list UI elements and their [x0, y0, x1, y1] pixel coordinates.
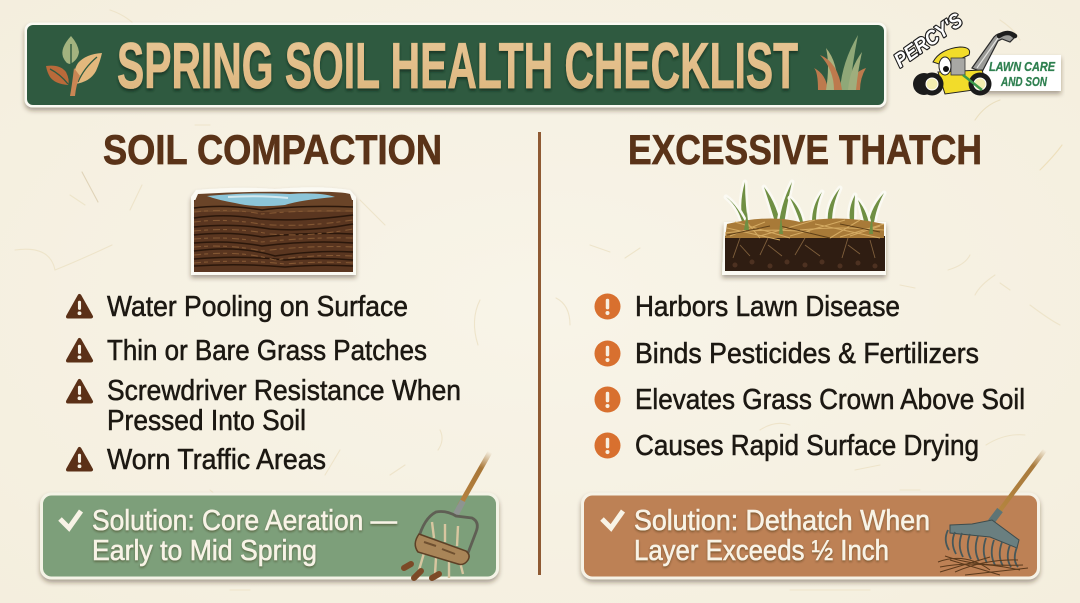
icon: check	[60, 511, 81, 528]
title banner	[24, 22, 886, 108]
item: lawn disease: Harbors Lawn Disease	[635, 291, 900, 323]
illustration: compacted soil with pooled water	[191, 187, 356, 275]
callout: dethatch solution	[582, 450, 1045, 578]
icon: core aerator tool	[404, 452, 490, 578]
callout: dethatch solution: Solution: Dethatch When	[634, 505, 930, 537]
icon: dethatching rake	[938, 450, 1045, 575]
item: thin grass: Thin or Bare Grass Patches	[107, 335, 427, 367]
item: screwdriver resistance: Pressed Into Soil	[107, 405, 306, 437]
item: screwdriver resistance: Screwdriver Resistance When	[107, 375, 461, 407]
logo: Percy's Lawn Care and Son: LAWN CARE	[989, 59, 1055, 74]
icon: check	[602, 511, 623, 528]
callout: core aeration solution	[42, 452, 498, 578]
item: rapid drying: Causes Rapid Surface Drying	[635, 430, 979, 462]
heading: soil compaction: SOIL COMPACTION	[103, 126, 442, 173]
list: compaction warning signs	[68, 291, 461, 476]
illustration: thatch layer over soil	[722, 182, 886, 275]
callout: core aeration solution: Solution: Core Aeration —	[92, 505, 397, 537]
logo: Percy's Lawn Care and Son	[890, 9, 1061, 95]
panel: soil compaction	[42, 126, 498, 578]
logo: Percy's Lawn Care and Son: PERCY'S	[890, 9, 967, 72]
list: thatch problems	[594, 291, 1025, 462]
item: water pooling: Water Pooling on Surface	[107, 291, 408, 323]
panel: excessive thatch	[582, 126, 1045, 578]
item: binds pesticides: Binds Pesticides & Fertilizers	[635, 338, 979, 370]
icon: leaves	[46, 36, 102, 96]
logo: Percy's Lawn Care and Son: AND SON	[1000, 74, 1047, 89]
icon: grass	[814, 35, 866, 90]
item: worn traffic areas: Worn Traffic Areas	[107, 444, 326, 476]
center divider	[538, 132, 541, 575]
item: elevates crown: Elevates Grass Crown Above Soil	[635, 384, 1025, 416]
callout: dethatch solution: Layer Exceeds ½ Inch	[634, 535, 889, 567]
item: screwdriver resistance	[68, 375, 461, 437]
callout: core aeration solution: Early to Mid Spring	[92, 535, 317, 567]
heading: excessive thatch: EXCESSIVE THATCH	[628, 126, 982, 173]
